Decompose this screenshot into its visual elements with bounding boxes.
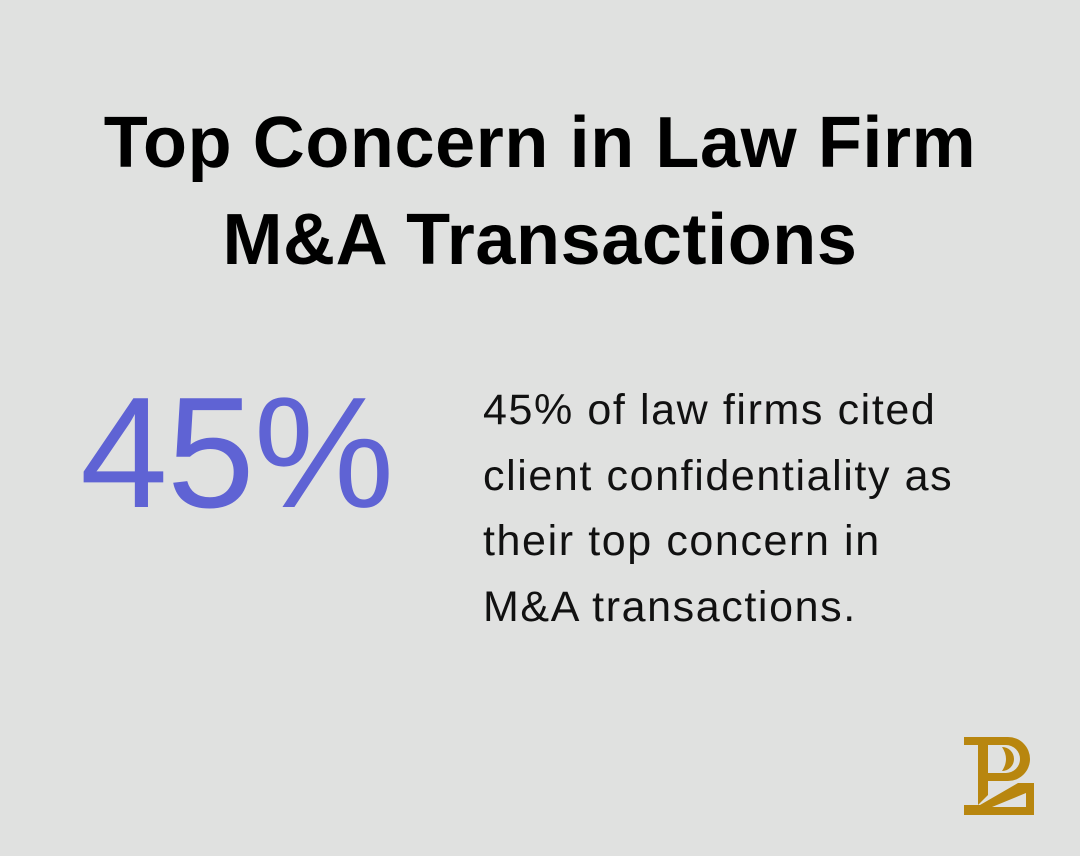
description text: 45% of law firms cited bbox=[483, 386, 936, 434]
title bbox=[104, 103, 976, 280]
title: Top Concern in Law Firm bbox=[104, 103, 976, 183]
big stat: 45%: 45% bbox=[80, 365, 393, 541]
description text: M&A transactions. bbox=[483, 582, 857, 630]
description text: their top concern in bbox=[483, 517, 881, 565]
title: M&A Transactions bbox=[222, 200, 858, 280]
description text: client confidentiality as bbox=[483, 452, 953, 500]
icon: logo bbox=[964, 737, 1034, 815]
description text bbox=[483, 386, 953, 630]
